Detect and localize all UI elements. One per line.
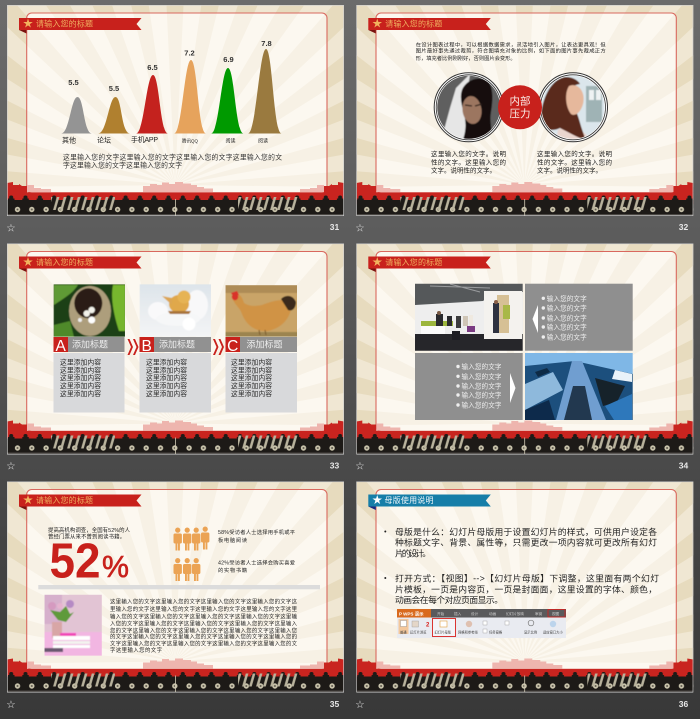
panel: bottom bullets: 输入您的文字 bbox=[462, 400, 502, 410]
caption right: 这里输入您的文字。说明 bbox=[537, 149, 612, 158]
WPS toolbar screenshot: 网格和参考线 bbox=[458, 630, 478, 634]
card C: 这里添加内容 bbox=[231, 381, 272, 390]
slide 33: three step cards bbox=[6, 244, 344, 472]
body paragraph bbox=[110, 598, 298, 654]
caption left: 这里输入您的文字。说明 bbox=[431, 149, 506, 158]
title ribbon bbox=[368, 256, 491, 272]
WPS toolbar screenshot: 视图 bbox=[552, 611, 560, 616]
stat text 2 bbox=[218, 558, 295, 574]
center badge: 内部 bbox=[510, 94, 530, 108]
bell chart: 手机APP bbox=[131, 135, 158, 144]
stat text 1: 58%受访者人士选择用手机或平 bbox=[218, 528, 296, 536]
center badge: 压力 bbox=[510, 107, 530, 120]
card B bbox=[140, 284, 212, 412]
page number: 31 bbox=[330, 222, 339, 232]
title ribbon: ★ bbox=[372, 496, 382, 506]
page number: 32 bbox=[679, 222, 688, 232]
page number: 34 bbox=[679, 460, 688, 470]
slide 34: photo and text grid bbox=[355, 244, 693, 472]
title ribbon: ★ bbox=[372, 258, 382, 268]
photo: flowers bbox=[44, 594, 102, 656]
bell chart: 腾讯QQ bbox=[182, 138, 199, 144]
divider bbox=[38, 585, 320, 589]
page number: ☆ bbox=[355, 699, 365, 711]
bullet text 2 bbox=[384, 572, 659, 605]
panel: bottom bullets bbox=[415, 353, 523, 420]
body paragraph: 字这里输入您的文字 bbox=[110, 646, 162, 654]
card A bbox=[54, 284, 126, 412]
bell chart: 6.9 bbox=[223, 55, 234, 64]
bullet text 1: 片的设计。 bbox=[395, 547, 431, 558]
WPS toolbar screenshot: 设计 bbox=[471, 611, 479, 616]
WPS toolbar screenshot: 插入 bbox=[454, 611, 462, 616]
bell chart: 论坛 bbox=[97, 136, 111, 144]
title ribbon: ★ bbox=[23, 258, 33, 268]
chart note: 这里输入您的文字这里输入您的文字这里输入您的文字这里输入您的文 bbox=[63, 152, 282, 162]
stat text 2: 的实物书籍 bbox=[218, 566, 247, 574]
people icons row 2 bbox=[174, 558, 200, 581]
chart note: 字这里输入您的文字这里输入您的文字 bbox=[63, 160, 182, 170]
panel: top bullets: 输入您的文字 bbox=[547, 332, 587, 342]
page number bbox=[6, 222, 339, 234]
intro text bbox=[416, 40, 606, 62]
panel: bottom bullets: 输入您的文字 bbox=[462, 362, 502, 371]
bullet text 2: 动画会在每个对应页面显示。 bbox=[395, 594, 503, 605]
page number: ☆ bbox=[355, 460, 365, 472]
bell chart: 5.5 bbox=[68, 78, 79, 87]
panel: bottom bullets: 输入您的文字 bbox=[462, 372, 502, 381]
page number: 36 bbox=[679, 699, 688, 709]
caption left: 文字。说明性的文字。 bbox=[431, 165, 496, 174]
panel: top bullets bbox=[525, 284, 633, 351]
body paragraph: 输入您的文字这里输入您的文字这里输入您的文字这里输入您的文字这里输 bbox=[110, 612, 298, 620]
bullet text 1 bbox=[384, 526, 657, 558]
page number bbox=[355, 460, 688, 472]
caption right: 文字。说明性的文字。 bbox=[537, 165, 602, 174]
title ribbon: ★ bbox=[372, 19, 382, 30]
page number bbox=[355, 699, 688, 711]
caption right: 性的文字。这里输入您的 bbox=[537, 157, 612, 166]
card B: 这里添加内容 bbox=[146, 373, 187, 382]
portrait left bbox=[434, 73, 503, 142]
card A: 这里添加内容 bbox=[60, 373, 101, 382]
body paragraph: 入您的文字这里输入您的文字这里输入您的文字这里输入您的文字这里输入 bbox=[110, 619, 298, 627]
body paragraph: 您的文字这里输入您的文字这里输入您的文字这里输入您的文字这里输入您 bbox=[110, 626, 298, 634]
title ribbon: 请输入您的标题 bbox=[385, 18, 442, 28]
card C: 添加标题 bbox=[246, 338, 282, 350]
WPS toolbar screenshot: 幻灯片放映 bbox=[506, 611, 524, 616]
big number: 52 bbox=[50, 534, 100, 588]
bell chart: 阅读 bbox=[226, 138, 236, 144]
title ribbon bbox=[19, 494, 142, 510]
WPS toolbar screenshot: 幻灯片母版 bbox=[434, 630, 452, 634]
panel: top bullets: 输入您的文字 bbox=[547, 304, 587, 313]
bell chart: 7.8 bbox=[261, 39, 272, 48]
bell chart: 5.5 bbox=[109, 84, 119, 93]
WPS toolbar screenshot: 适应窗口大小 bbox=[543, 630, 563, 634]
card C: 这里添加内容 bbox=[231, 358, 272, 366]
bullet text 1: 母版是什么：幻灯片母版用于设置幻灯片的样式，可供用户设定各 bbox=[395, 526, 657, 537]
page number bbox=[355, 222, 688, 234]
WPS toolbar screenshot: 幻灯片浏览 bbox=[410, 630, 427, 634]
caption left: 性的文字。这里输入您的 bbox=[431, 157, 506, 166]
card C: C bbox=[227, 338, 238, 355]
card C: 这里添加内容 bbox=[231, 365, 272, 374]
title ribbon: 请输入您的标题 bbox=[36, 495, 93, 505]
bell chart: 6.5 bbox=[147, 63, 158, 72]
WPS toolbar screenshot: 显示比例 bbox=[524, 630, 538, 634]
card B: 这里添加内容 bbox=[146, 389, 187, 398]
card C: 这里添加内容 bbox=[231, 373, 272, 382]
bullet text 2: 片模板，一页是内容页，一页是封面面，这里设置的字体、颜色， bbox=[395, 584, 657, 594]
bell chart bbox=[61, 39, 282, 144]
caption right bbox=[537, 149, 612, 174]
page number: ☆ bbox=[6, 222, 16, 234]
body paragraph: 这里输入您的文字这里输入您的文字这里输入您的文字这里输入您的文字这 bbox=[110, 598, 298, 606]
WPS toolbar screenshot: 任务窗格 bbox=[489, 630, 503, 634]
intro text bbox=[48, 526, 131, 540]
people icons row 1 bbox=[174, 526, 209, 550]
intro text: 图片最好事先通过裁剪，符合图填充对象的比例，如下面的图片事先裁成正方 bbox=[416, 46, 606, 54]
panel: bottom bullets: 输入您的文字 bbox=[462, 382, 502, 390]
photo: office bbox=[415, 283, 523, 351]
WPS toolbar screenshot bbox=[397, 609, 566, 638]
card A: 这里添加内容 bbox=[60, 358, 101, 366]
body paragraph: 的文字这里输入您的文字这里输入您的文字这里输入您的文字这里输入您的 bbox=[110, 632, 297, 640]
intro text: 在设计图表过程中，可以根据数据需求，灵活地引入图片，让表达更具观！但 bbox=[416, 40, 606, 48]
page number: ☆ bbox=[6, 699, 16, 711]
card A: 这里添加内容 bbox=[60, 381, 101, 390]
WPS toolbar screenshot: 开始 bbox=[437, 611, 445, 616]
bell chart: 阅读 bbox=[258, 138, 268, 144]
title ribbon: 请输入您的标题 bbox=[36, 257, 93, 267]
card B: 这里添加内容 bbox=[146, 365, 187, 374]
panel: top bullets: 输入您的文字 bbox=[547, 314, 587, 322]
panel: bottom bullets: 输入您的文字 bbox=[462, 391, 502, 400]
WPS toolbar screenshot: 动画 bbox=[489, 611, 497, 616]
body paragraph: 文字这里输入您的文字这里输入您的文字这里输入您的文字这里输入您的文 bbox=[110, 640, 298, 648]
title ribbon bbox=[368, 18, 491, 34]
page number: 33 bbox=[330, 460, 339, 470]
page number: ☆ bbox=[6, 460, 16, 472]
body paragraph: 里输入您的文字这里输入您的文字这里输入您的文字这里输入您的文字这里 bbox=[110, 605, 298, 613]
card A: 这里添加内容 bbox=[60, 365, 101, 374]
big number bbox=[50, 534, 129, 588]
title ribbon bbox=[19, 256, 142, 272]
photo: building bbox=[525, 353, 633, 420]
card B: 这里添加内容 bbox=[146, 381, 187, 390]
title ribbon: 请输入您的标题 bbox=[385, 257, 442, 267]
panel: top bullets: 输入您的文字 bbox=[547, 294, 587, 303]
page number bbox=[6, 699, 339, 711]
WPS toolbar screenshot: 2 bbox=[426, 622, 430, 628]
card A: 添加标题 bbox=[72, 338, 108, 350]
page number bbox=[6, 460, 339, 472]
bell chart: 7.2 bbox=[184, 48, 195, 58]
page number: 35 bbox=[330, 699, 339, 709]
slide 35: 52 percent statistics bbox=[6, 482, 344, 711]
caption left bbox=[431, 149, 506, 174]
card C: 这里添加内容 bbox=[231, 389, 272, 398]
page number: ☆ bbox=[355, 222, 365, 234]
intro text: 提高高机构调查，全国有52%的人 bbox=[48, 526, 131, 534]
WPS toolbar screenshot: P WPS 演示 bbox=[399, 610, 424, 618]
slide 36: master slide instructions bbox=[355, 482, 693, 711]
stat text 1: 板电脑阅读 bbox=[218, 536, 248, 544]
bell chart: 其他 bbox=[62, 136, 76, 144]
stat text 1 bbox=[218, 528, 296, 544]
title ribbon: 母版使用说明 bbox=[384, 495, 434, 505]
arrow A to B bbox=[128, 339, 138, 355]
intro text: 曾经门票从来不曾到阅读书籍。 bbox=[48, 532, 125, 540]
big number: % bbox=[102, 549, 129, 584]
bullet text 1: 种标题文字、背景、属性等，只需更改一项内容就可更改所有幻灯 bbox=[395, 537, 657, 548]
chart note bbox=[63, 152, 282, 170]
slide 32: two portraits bbox=[355, 5, 693, 234]
card B: 添加标题 bbox=[159, 338, 195, 350]
card B: 这里添加内容 bbox=[146, 358, 187, 366]
title ribbon bbox=[368, 494, 491, 510]
title ribbon: 请输入您的标题 bbox=[36, 18, 93, 28]
title ribbon: ★ bbox=[23, 496, 33, 506]
title ribbon bbox=[19, 18, 142, 34]
WPS toolbar screenshot: 审阅 bbox=[535, 611, 543, 616]
panel: top bullets: 输入您的文字 bbox=[547, 322, 587, 332]
arrow B to C bbox=[213, 339, 224, 355]
card A: A bbox=[56, 338, 67, 355]
WPS toolbar screenshot: 普通 bbox=[400, 630, 407, 634]
intro text: 形，填充者比例刚刚好，否则图片会变形。 bbox=[416, 54, 516, 62]
card A: 这里添加内容 bbox=[60, 389, 101, 398]
center badge bbox=[498, 85, 542, 129]
card C bbox=[225, 285, 298, 412]
title ribbon: ★ bbox=[23, 19, 33, 30]
slide 31: bell chart bbox=[6, 5, 344, 234]
card B: B bbox=[142, 338, 152, 355]
portrait right bbox=[538, 73, 608, 142]
stat text 2: 42%受访者人士选择会购买喜爱 bbox=[218, 558, 295, 566]
bullet text 2: 打开方式：【视图】-->【幻灯片母版】下调整，这里面有两个幻灯 bbox=[395, 572, 659, 584]
